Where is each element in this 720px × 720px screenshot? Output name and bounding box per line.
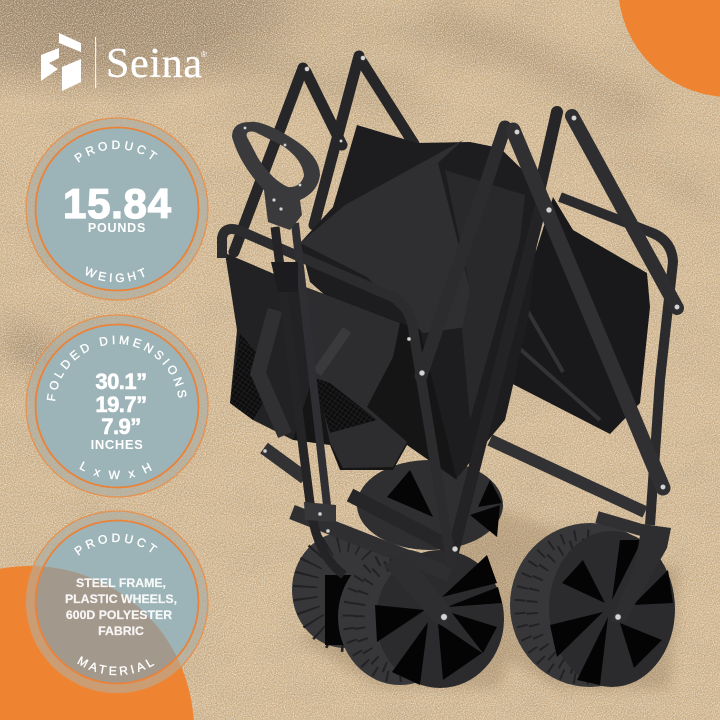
- bottom chassis: [292, 495, 655, 574]
- badge heading: PRODUCT: [74, 140, 158, 162]
- material list: FABRIC: [98, 624, 144, 638]
- upper rear frame arms: [234, 56, 557, 252]
- lower cross bar: [490, 440, 645, 512]
- dimension order: L x W x H: [80, 461, 152, 480]
- mesh pocket left: [230, 333, 263, 420]
- left fabric bag: [225, 253, 312, 440]
- badge heading: PRODUCT: [74, 534, 158, 556]
- second front wheel: [292, 532, 398, 648]
- back wheel: [357, 460, 503, 550]
- lower left frame bar: [264, 448, 305, 478]
- badge footer: MATERIAL: [77, 656, 154, 676]
- bag right panel: [300, 285, 407, 468]
- rear bin inner bars: [510, 310, 600, 420]
- badge: folded dimensions: [25, 314, 209, 498]
- wheel tread: [338, 549, 462, 685]
- fabric fold highlight: [300, 140, 470, 333]
- dimension unit: INCHES: [91, 437, 143, 452]
- pull handle shaft: [271, 223, 344, 575]
- badge heading: FOLDED DIMENSIONS: [46, 335, 186, 401]
- height value: 7.9”: [101, 414, 141, 439]
- rear fabric bin: [495, 197, 650, 434]
- soft ground shadow: [300, 510, 680, 690]
- width value: 19.7”: [95, 392, 147, 417]
- logo divider: [95, 37, 96, 88]
- wagon: [222, 56, 680, 690]
- carry strap left: [258, 310, 285, 435]
- logo mark: [41, 33, 81, 91]
- carry strap right: [317, 330, 347, 373]
- logo wordmark: Seina: [106, 41, 202, 87]
- length value: 30.1”: [95, 369, 147, 394]
- right wheel fork: [611, 524, 671, 622]
- wheel face: [549, 531, 675, 687]
- wheel face: [376, 550, 504, 688]
- weight unit: POUNDS: [88, 221, 146, 235]
- wheel spokes: [375, 555, 502, 685]
- material list: PLASTIC WHEELS,: [65, 592, 177, 606]
- rear wagon frame: [560, 197, 673, 525]
- badge footer: WEIGHT: [86, 266, 144, 282]
- main fabric back panel: [300, 125, 540, 478]
- orange corner shape bottom left: [0, 566, 194, 720]
- material list: [65, 576, 177, 638]
- badge: product material: [26, 510, 209, 694]
- wheel spokes: [550, 540, 673, 685]
- fabric mid panel: [445, 170, 525, 420]
- frame rivets: [243, 56, 680, 620]
- weight value: 15.84: [63, 180, 172, 227]
- orange corner shape top right: [619, 0, 720, 97]
- near side frame: [222, 229, 452, 568]
- shadowed fabric between bags: [293, 285, 457, 480]
- registered mark: ®: [201, 50, 207, 59]
- diagonal folding struts: [421, 116, 677, 552]
- material list: 600D POLYESTER: [66, 608, 172, 622]
- material list: STEEL FRAME,: [76, 576, 166, 590]
- logo: [41, 33, 207, 91]
- front wheel fork: [384, 552, 452, 628]
- wheel tread: [510, 523, 670, 687]
- mesh pocket right: [313, 377, 377, 433]
- pull handle grip: [232, 122, 320, 230]
- front wheel: [338, 549, 504, 688]
- badge: product weight: [25, 117, 209, 301]
- right wheel: [510, 523, 675, 687]
